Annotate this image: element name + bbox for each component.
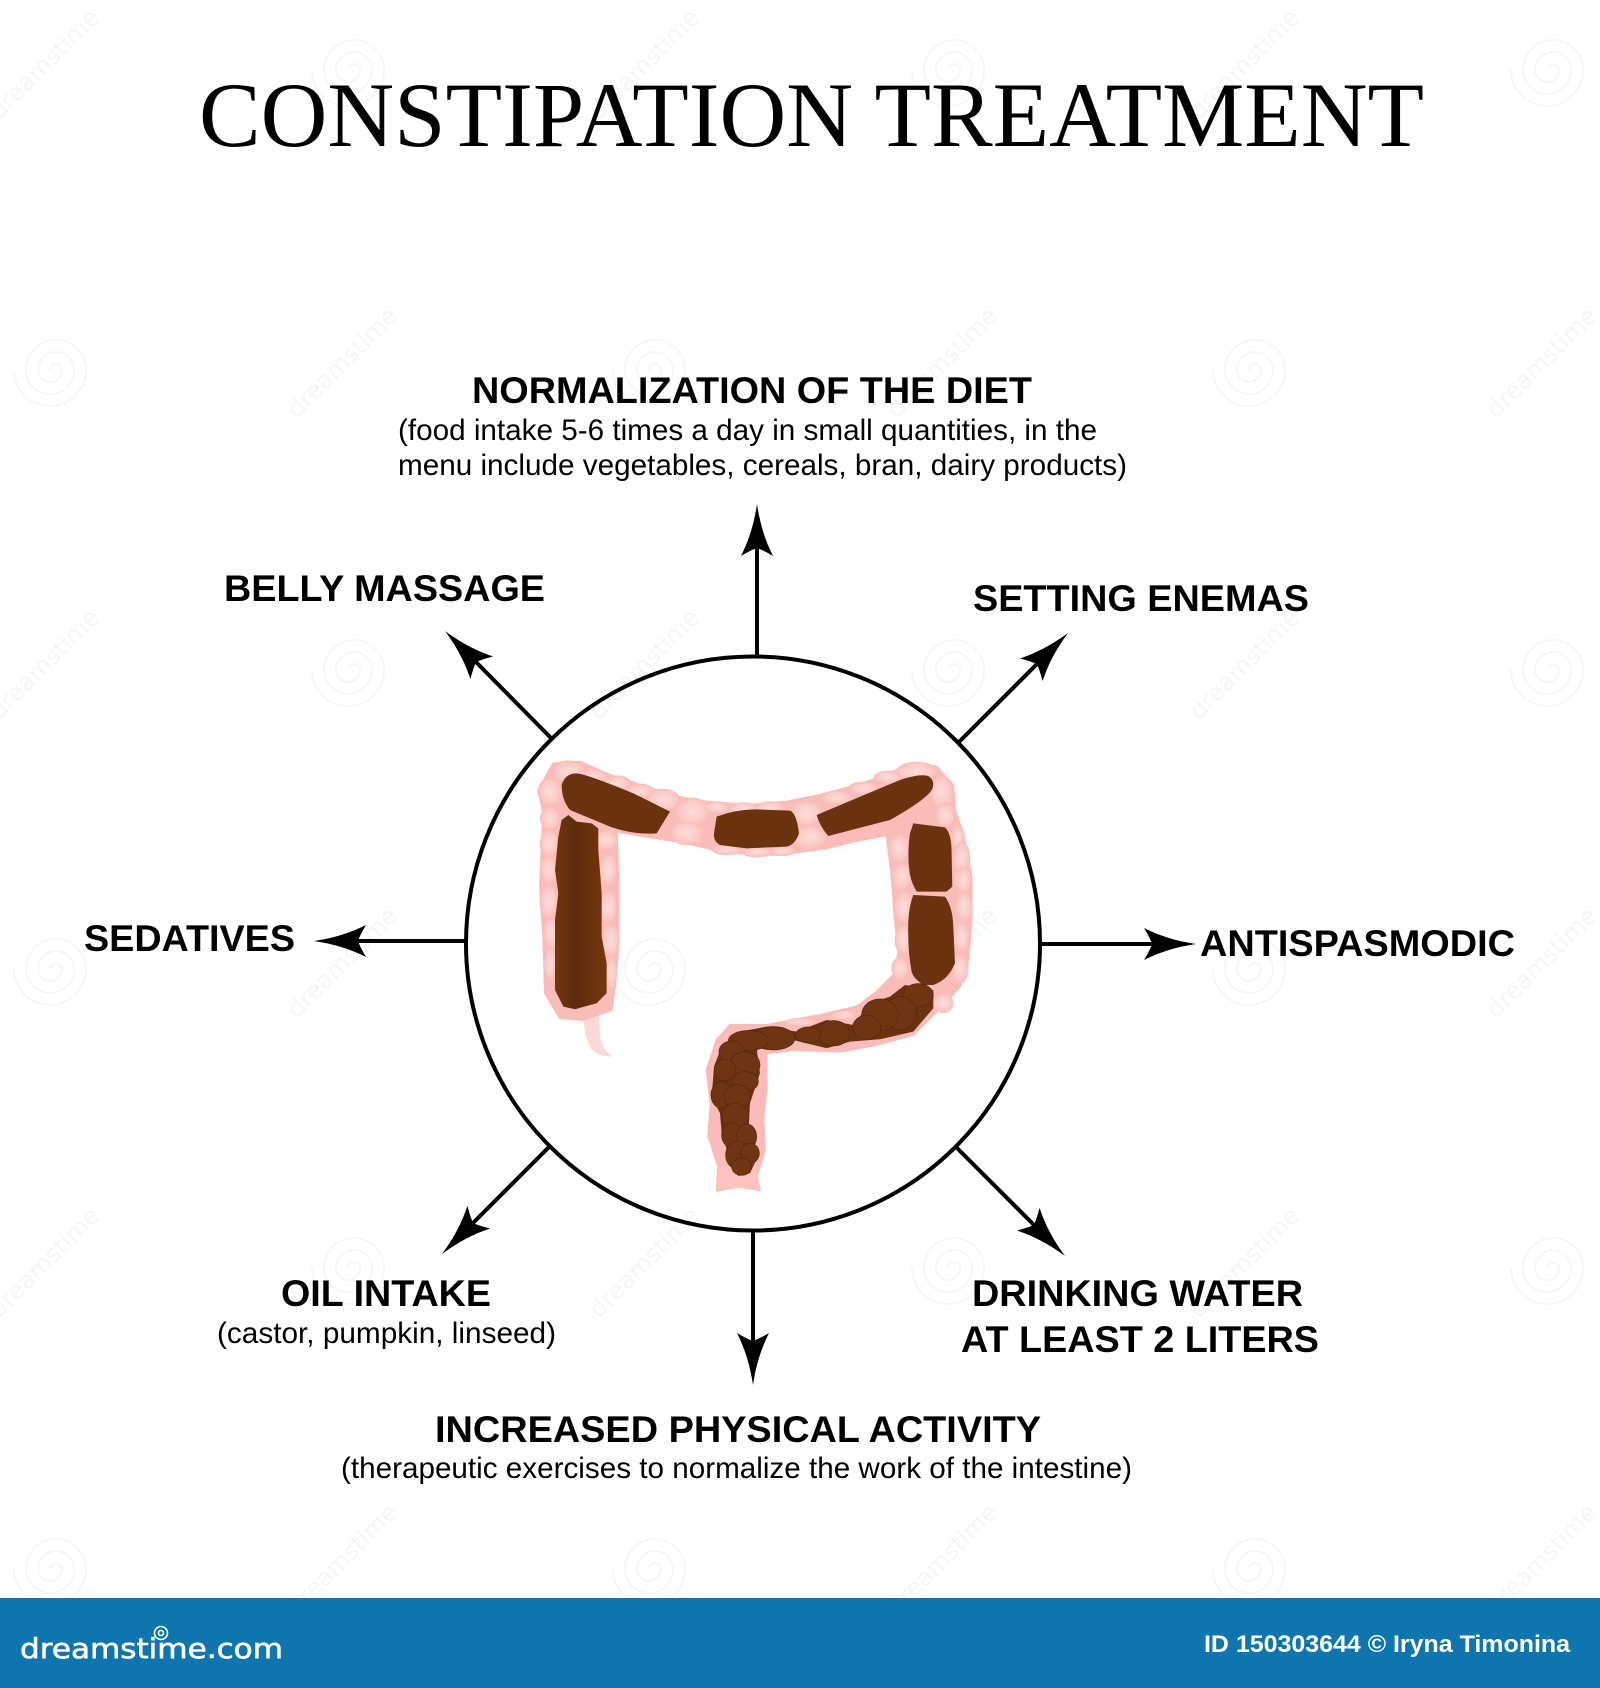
label: sedatives: SEDATIVES [84,918,295,959]
rectum opening [717,1167,760,1191]
arrow: north west [434,620,551,738]
label: setting enemas: SETTING ENEMAS [973,578,1309,619]
arrow: south west [431,1146,550,1265]
label: increased physical activity [341,1409,1132,1485]
label: belly massage: BELLY MASSAGE [224,568,545,609]
label: oil intake [217,1273,556,1350]
footer band [0,1598,1600,1688]
footer logo: dreamstime.com [20,1632,283,1665]
colon illustration [538,760,973,1191]
label: drinking water: DRINKING WATER [972,1273,1303,1314]
stool segments [555,773,955,1009]
arrow: south [737,1232,769,1385]
arrow: west [314,925,466,957]
footer logo spiral [154,1626,168,1640]
impacted stool mass [712,985,933,1176]
arrow: north east [958,622,1079,743]
arrow: south east [956,1147,1076,1267]
label: increased physical activity: INCREASED PHYSICAL ACTIVITY [435,1409,1041,1450]
label: drinking water: AT LEAST 2 LITERS [961,1319,1319,1360]
label: oil intake: OIL INTAKE [281,1273,491,1314]
label: oil intake: (castor, pumpkin, linseed) [217,1317,556,1350]
label: normalization of the diet [398,370,1127,482]
footer credit: ID 150303644 © Iryna Timonina [1204,1631,1571,1658]
central circle [466,656,1040,1230]
title: CONSTIPATION TREATMENT [199,64,1424,166]
colon wall [538,762,972,1191]
label: normalization of the diet: (food intake 5-6 times a day in small quantities, in the [398,414,1097,447]
label: normalization of the diet: NORMALIZATION OF THE DIET [472,370,1032,411]
colon haustra lobes [538,760,973,1026]
label: increased physical activity: (therapeutic exercises to normalize the work of the intestine) [341,1452,1132,1485]
label: antispasmodic: ANTISPASMODIC [1200,923,1515,964]
label: normalization of the diet: menu include vegetables, cereals, bran, dairy products) [398,449,1127,482]
arrow: north [741,504,773,657]
impacted stool lumps [711,984,933,1175]
label: drinking water [961,1273,1319,1360]
appendix [583,1013,612,1057]
arrow: east [1041,928,1196,960]
